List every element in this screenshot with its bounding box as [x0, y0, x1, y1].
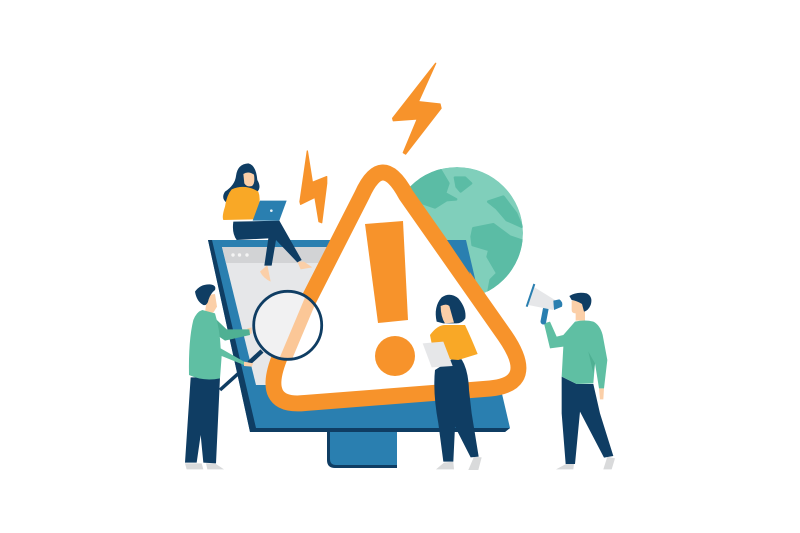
- laptop: [253, 201, 287, 221]
- trousers: [185, 377, 220, 463]
- monitor: [208, 240, 510, 468]
- hair: [436, 295, 466, 323]
- trousers: [562, 377, 613, 464]
- sweater: [223, 187, 260, 220]
- monitor stand: [327, 430, 397, 466]
- globe corner of monitor: [447, 240, 470, 274]
- sweater: [544, 320, 607, 388]
- face and neck: [572, 300, 585, 321]
- screen header bar: [222, 247, 458, 263]
- person: man with megaphone: [527, 284, 615, 469]
- icon: globe: [410, 167, 523, 293]
- hand: [599, 388, 604, 399]
- megaphone: [527, 284, 562, 322]
- monitor body: [208, 240, 510, 432]
- laptop logo: [270, 209, 273, 212]
- face: [205, 294, 217, 313]
- arm near lens: [213, 317, 250, 341]
- face: [243, 172, 254, 186]
- hair: [223, 163, 259, 203]
- trousers: [233, 221, 302, 266]
- handle: [249, 351, 262, 363]
- mouth: [553, 299, 562, 310]
- shoes: [436, 462, 454, 469]
- handle: [543, 309, 546, 322]
- lens: [255, 293, 314, 358]
- magnifying glass: [220, 288, 330, 390]
- person: woman with laptop: [223, 163, 312, 282]
- warning triangle: [273, 172, 518, 403]
- sweater: [189, 310, 244, 379]
- icon: large lightning bolt: [393, 63, 441, 154]
- trousers: [434, 358, 479, 462]
- person: man with magnifier: [185, 284, 253, 469]
- rim: [527, 284, 534, 307]
- shoes: [556, 464, 574, 469]
- exclamation mark: [365, 221, 415, 376]
- feet: [260, 265, 271, 282]
- hair: [195, 284, 215, 305]
- sleeve shade: [588, 352, 595, 373]
- illustration: warning scene: [185, 62, 615, 470]
- clipboard: [423, 342, 453, 367]
- hands: [244, 362, 253, 367]
- face: [441, 305, 454, 323]
- hair: [569, 293, 591, 312]
- shoes: [185, 463, 203, 469]
- sweater: [430, 325, 478, 360]
- cone: [528, 287, 555, 310]
- person: woman with clipboard: [423, 295, 482, 470]
- monitor screen: [222, 247, 470, 385]
- icon: small lightning bolt: [300, 151, 327, 223]
- window dots: [231, 253, 249, 257]
